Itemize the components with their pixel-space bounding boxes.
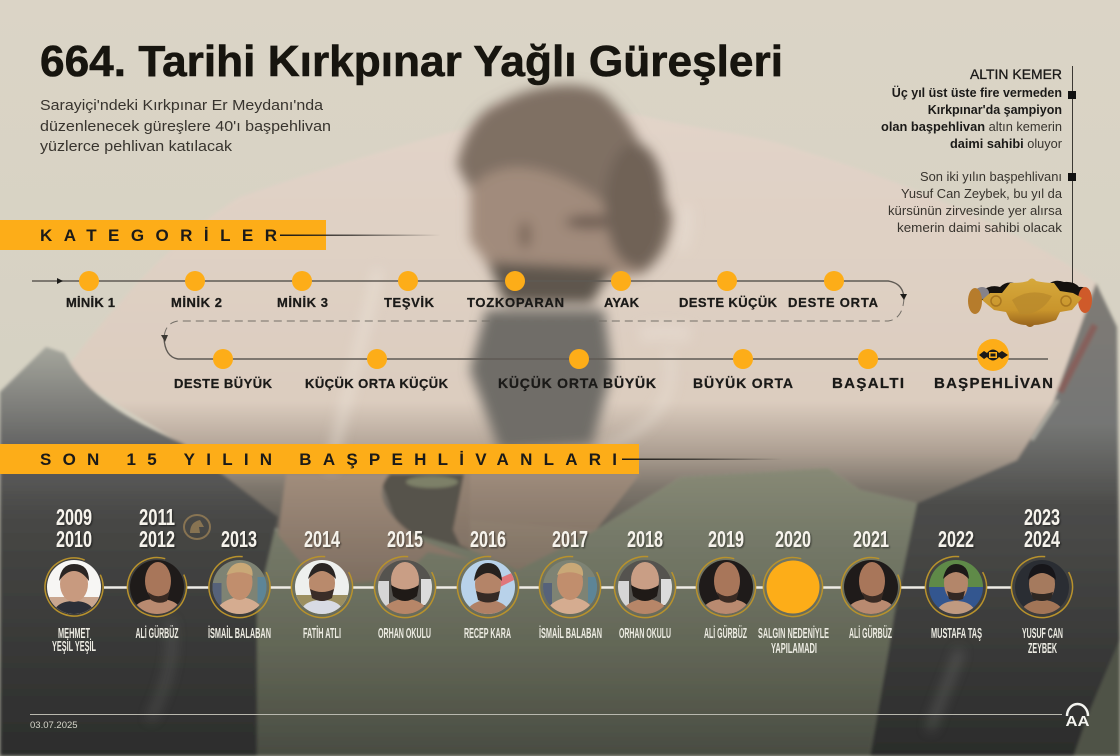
- category track: [32, 278, 1048, 359]
- year labels: 2021: [853, 526, 889, 552]
- champion names: ALİ GÜRBÜZ: [704, 625, 747, 642]
- champion names: YAPILAMADI: [771, 641, 817, 657]
- champion names: SALGIN NEDENİYLE: [758, 625, 829, 642]
- banner: son 15 yılın başpehlivanları: [0, 444, 782, 474]
- year labels: 2024: [1024, 526, 1060, 552]
- icon: small emblem: [184, 515, 210, 539]
- logo: AA: [1066, 704, 1090, 730]
- champion names: MEHMET: [58, 626, 90, 642]
- banner: kategoriler: KATEGORİLER: [40, 226, 277, 245]
- subtitle text block: Sarayiçi'ndeki Kırkpınar Er Meydanı'nda: [40, 97, 324, 114]
- row 2 nodes and labels: BÜYÜK ORTA: [693, 375, 793, 391]
- champion names: ALİ GÜRBÜZ: [136, 625, 179, 642]
- champion names: ORHAN OKULU: [378, 626, 431, 642]
- row 2 nodes and labels: KÜÇÜK ORTA KÜÇÜK: [305, 376, 449, 391]
- row 1 nodes and labels: AYAK: [604, 295, 640, 310]
- altın kemer text 1: daimi sahibi oluyor: [950, 137, 1062, 151]
- subtitle text block: yüzlerce pehlivan katılacak: [40, 138, 233, 155]
- date: 03.07.2025: [30, 720, 78, 731]
- portrait: Ali Gürbüz: [118, 548, 196, 626]
- altın kemer text 2: Yusuf Can Zeybek, bu yıl da: [901, 187, 1062, 201]
- 2020 empty orange marker: [754, 548, 832, 626]
- year labels: 2015: [387, 526, 423, 552]
- subtitle text block: [40, 97, 331, 155]
- icon: golden belt: [968, 278, 1092, 327]
- subtitle text block: düzenlenecek güreşlere 40'ı başpehlivan: [40, 118, 331, 135]
- champion names: İSMAİL BALABAN: [208, 625, 271, 642]
- altın kemer heading: ALTIN KEMER: [970, 66, 1062, 82]
- altın kemer text 2: kürsünün zirvesinde yer alırsa: [888, 204, 1062, 218]
- banner: kategoriler: [0, 220, 440, 250]
- year labels: 2016: [470, 526, 506, 552]
- champion names: YEŞİL YEŞİL: [52, 638, 96, 655]
- champion names: [52, 625, 1063, 657]
- altın kemer text 2: [888, 170, 1063, 235]
- champion names: ALİ GÜRBÜZ: [849, 625, 892, 642]
- banner: son 15 yılın başpehlivanları: SON 15 YILIN BAŞPEHLİVANLARI: [40, 450, 617, 469]
- year labels: 2014: [304, 526, 340, 552]
- year labels: 2017: [552, 526, 588, 552]
- altın kemer text 1: [881, 85, 1062, 151]
- portrait: Recep Kara: [456, 556, 520, 618]
- footer: [30, 704, 1090, 731]
- row 1 nodes and labels: MİNİK 3: [277, 295, 328, 310]
- portrait: İsmail Balaban 2017: [529, 546, 611, 628]
- row 1 nodes and labels: DESTE KÜÇÜK: [679, 295, 778, 310]
- portrait: Mehmet Yeşil Yeşil: [44, 557, 104, 617]
- row 2 nodes and labels: BAŞALTI: [832, 375, 904, 392]
- panel: altın kemer note: [881, 66, 1076, 285]
- portrait: Mustafa Taş: [924, 556, 988, 618]
- row 1 nodes and labels: TOZKOPARAN: [467, 295, 564, 310]
- portrait: Ali Gürbüz 2019: [687, 548, 765, 626]
- year labels: 2012: [139, 526, 175, 552]
- champion names: MUSTAFA TAŞ: [931, 626, 982, 642]
- champion names: ZEYBEK: [1028, 641, 1057, 657]
- portrait: Yusuf Can Zeybek: [1010, 556, 1074, 618]
- row 1 nodes and labels: [66, 271, 879, 310]
- altın kemer text 2: kemerin daimi sahibi olacak: [897, 221, 1063, 235]
- logo: AA: AA: [1066, 713, 1090, 730]
- portrait: İsmail Balaban: [199, 546, 280, 628]
- year labels: 2023: [1024, 504, 1060, 530]
- altın kemer text 1: Üç yıl üst üste fire vermeden: [892, 85, 1062, 100]
- title: 664. Tarihi Kırkpınar Yağlı Güreşleri: [40, 37, 783, 86]
- icon: başpehlivan belt node: [977, 339, 1009, 371]
- champions timeline line: [104, 586, 1012, 589]
- row 1 nodes and labels: MİNİK 2: [171, 295, 222, 310]
- champion names: ORHAN OKULU: [619, 626, 671, 642]
- altın kemer text 1: olan başpehlivan altın kemerin: [881, 120, 1062, 134]
- portrait: Orhan Okulu: [364, 546, 446, 628]
- year labels: 2019: [708, 526, 744, 552]
- year labels: 2009: [56, 504, 92, 530]
- text: YUSUF CAN: [1022, 626, 1063, 642]
- row 2 nodes and labels: DESTE BÜYÜK: [174, 376, 273, 391]
- year labels: 2020: [775, 526, 811, 552]
- year labels: 2011: [139, 504, 175, 530]
- row 1 nodes and labels: TEŞVİK: [384, 295, 435, 310]
- year labels: 2022: [938, 526, 974, 552]
- row 1 nodes and labels: DESTE ORTA: [788, 295, 879, 310]
- champion names: İSMAİL BALABAN: [539, 625, 602, 642]
- portrait: Fatih Atlı: [290, 556, 354, 618]
- row 2 nodes and labels: [174, 349, 1053, 392]
- altın kemer text 2: Son iki yılın başpehlivanı: [920, 170, 1062, 184]
- row 2 nodes and labels: KÜÇÜK ORTA BÜYÜK: [498, 375, 656, 391]
- champion names: FATİH ATLI: [303, 625, 341, 642]
- altın kemer text 1: Kırkpınar'da şampiyon: [928, 103, 1062, 117]
- row 2 nodes and labels: BAŞPEHLİVAN: [934, 375, 1053, 392]
- year labels: 2010: [56, 526, 92, 552]
- year labels: 2013: [221, 526, 257, 552]
- champion names: RECEP KARA: [464, 626, 511, 642]
- year labels: 2018: [627, 526, 663, 552]
- row 1 nodes and labels: MİNİK 1: [66, 295, 115, 310]
- portrait: Orhan Okulu 2018: [604, 546, 686, 628]
- year labels: [56, 504, 1060, 552]
- portrait: Ali Gürbüz 2021: [832, 548, 910, 626]
